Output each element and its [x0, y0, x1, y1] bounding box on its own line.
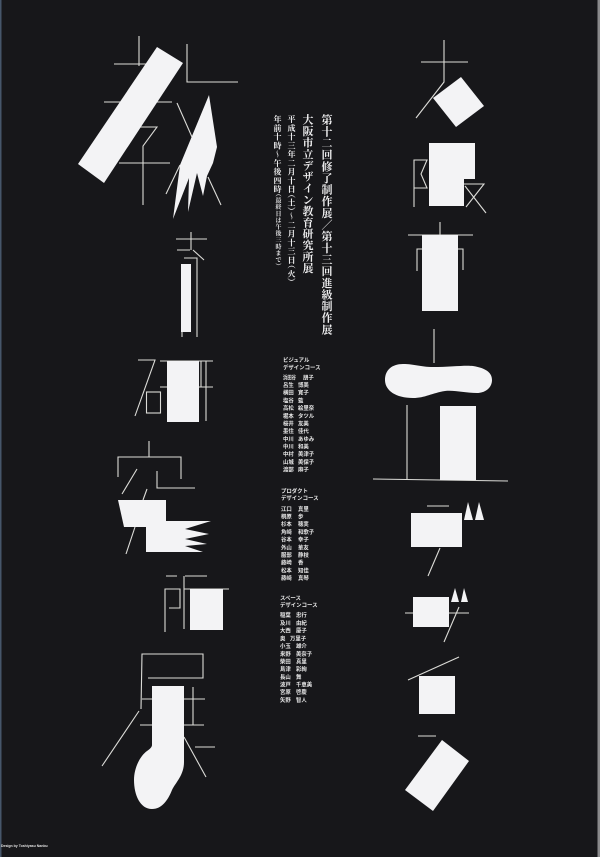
name list: space design course: 波戸: [280, 680, 291, 688]
name list: product design course: 松本: [281, 566, 292, 574]
name list: visual design course: 中川: [283, 435, 294, 443]
name list: space design course: 柴田: [280, 658, 291, 666]
name list: visual design course: 絵里奈: [298, 404, 315, 412]
dates: 平成十三年二月十日 （ 土 ） ～二月十三日 （ 火 ）: [287, 115, 296, 283]
name list: product design course: 服部: [281, 551, 292, 559]
name list: product design course: 谷本: [281, 536, 292, 544]
name list: visual design course: 美津子: [298, 450, 315, 458]
name list: visual design course: 呂生: [283, 381, 294, 389]
name list: space design course: 稲葉: [280, 611, 291, 619]
glyph: 展: [102, 654, 215, 809]
name list: visual design course: 和美: [298, 442, 309, 450]
name list: product design course: 桐原: [281, 512, 292, 520]
name list: visual design course: 桜井: [283, 420, 294, 428]
title line 2: 大阪市立デザイン教育研究所展: [301, 114, 313, 274]
name list: space design course: 長山: [280, 673, 291, 681]
name list: product design course: 杉本: [281, 520, 292, 528]
glyph: 究: [118, 441, 211, 554]
name list: space design course: [280, 595, 317, 704]
name list: space design course: 千恵美: [296, 680, 313, 688]
name list: visual design course: 美保子: [298, 458, 315, 466]
glyph: 大: [416, 40, 484, 127]
name list: visual design course: 朋子: [303, 374, 314, 382]
name list: space design course: 真里: [296, 658, 307, 666]
glyph: 育: [176, 232, 207, 337]
name list: space design course: 忠行: [296, 611, 307, 619]
name list: product design course: 和歌子: [298, 528, 315, 536]
name list: product design course: 穂実: [298, 520, 309, 528]
name list: product design course: 江口: [281, 505, 292, 513]
name list: visual design course: 浜田谷: [283, 374, 296, 382]
name list: visual design course: 山城: [283, 458, 294, 466]
name list: visual design course: ビジュアル: [283, 356, 310, 364]
glyph: 立: [373, 329, 508, 481]
name list: product design course: 真琴: [298, 574, 309, 582]
name list: visual design course: 寛子: [298, 389, 309, 397]
name list: space design course: 慶子: [296, 627, 307, 635]
name list: space design course: 宮原: [280, 688, 291, 696]
name list: space design course: 奥: [280, 634, 286, 642]
glyph: イ: [408, 657, 459, 714]
name list: product design course: 静枝: [298, 551, 309, 559]
name list: visual design course: 塩谷: [283, 396, 294, 404]
name list: visual design course: 渡部: [283, 466, 294, 474]
name list: product design course: 藤崎: [281, 559, 292, 567]
glyph: 阪: [414, 143, 486, 213]
name list: visual design course: 高松: [283, 404, 294, 412]
name list: visual design course: 友美: [298, 420, 309, 428]
name list: space design course: デザインコース: [280, 601, 317, 609]
glyph: ン: [405, 736, 469, 811]
name list: space design course: スペース: [280, 595, 301, 602]
name list: visual design course: 藍: [298, 396, 304, 404]
name list: space design course: 啓慶: [296, 688, 307, 696]
name list: product design course: 角崎: [281, 528, 292, 536]
name list: product design course: 幸子: [298, 536, 309, 544]
name list: product design course: 知佳: [298, 566, 309, 574]
name list: visual design course: 中村: [283, 450, 294, 458]
name list: space design course: 小玉: [280, 642, 291, 650]
name list: space design course: 及川: [280, 619, 291, 627]
name list: visual design course: 中川: [283, 442, 294, 450]
name list: visual design course: 麻子: [298, 466, 309, 474]
name list: space design course: 島津: [280, 665, 291, 673]
opening hours: 年前十時～午後四時 （ 最終日は午後三時まで ）: [273, 115, 282, 267]
name list: product design course: [281, 487, 318, 582]
name list: space design course: 雄介: [296, 642, 307, 650]
name list: visual design course: デザインコース: [283, 364, 320, 372]
name list: product design course: 華友: [298, 543, 309, 551]
name list: space design course: 万里子: [290, 635, 307, 642]
name list: space design course: 矢野: [280, 696, 291, 704]
name list: product design course: 香: [298, 559, 304, 567]
name list: space design course: 大西: [280, 627, 291, 635]
name list: product design course: デザインコース: [281, 494, 318, 502]
name list: visual design course: 博美: [298, 381, 309, 389]
name list: space design course: 智人: [296, 696, 307, 704]
name list: visual design course: 横田: [283, 389, 294, 397]
name list: space design course: 彩絢: [296, 665, 307, 673]
name list: product design course: プロダクト: [281, 487, 308, 495]
glyph: デ: [411, 502, 484, 576]
glyph: 市: [408, 222, 473, 311]
glyph: 教: [78, 36, 238, 219]
name list: product design course: 外山: [281, 543, 292, 551]
name list: visual design course: タツル: [298, 412, 315, 420]
name list: visual design course: 堀本: [283, 412, 294, 420]
glyph: ザ: [405, 588, 469, 642]
name list: product design course: 真里: [298, 505, 309, 513]
glyph: 所: [165, 576, 229, 632]
name list: visual design course: [283, 356, 320, 474]
title line 1: 第十二回修了制作展／第十三回進級制作展: [320, 114, 332, 335]
name list: product design course: 歩: [298, 512, 304, 520]
name list: space design course: 来野: [280, 650, 291, 658]
name list: visual design course: 墨住: [283, 427, 294, 435]
name list: space design course: 由紀: [296, 619, 307, 627]
name list: visual design course: あゆみ: [298, 435, 315, 443]
name list: visual design course: 佳代: [298, 427, 309, 435]
glyph: 研: [135, 360, 213, 422]
name list: space design course: 美奈子: [296, 650, 313, 658]
name list: product design course: 藤崎: [281, 574, 292, 582]
credit: Design by Toshiyasu Nanbu: [1, 844, 48, 848]
name list: space design course: 舞: [296, 673, 302, 681]
